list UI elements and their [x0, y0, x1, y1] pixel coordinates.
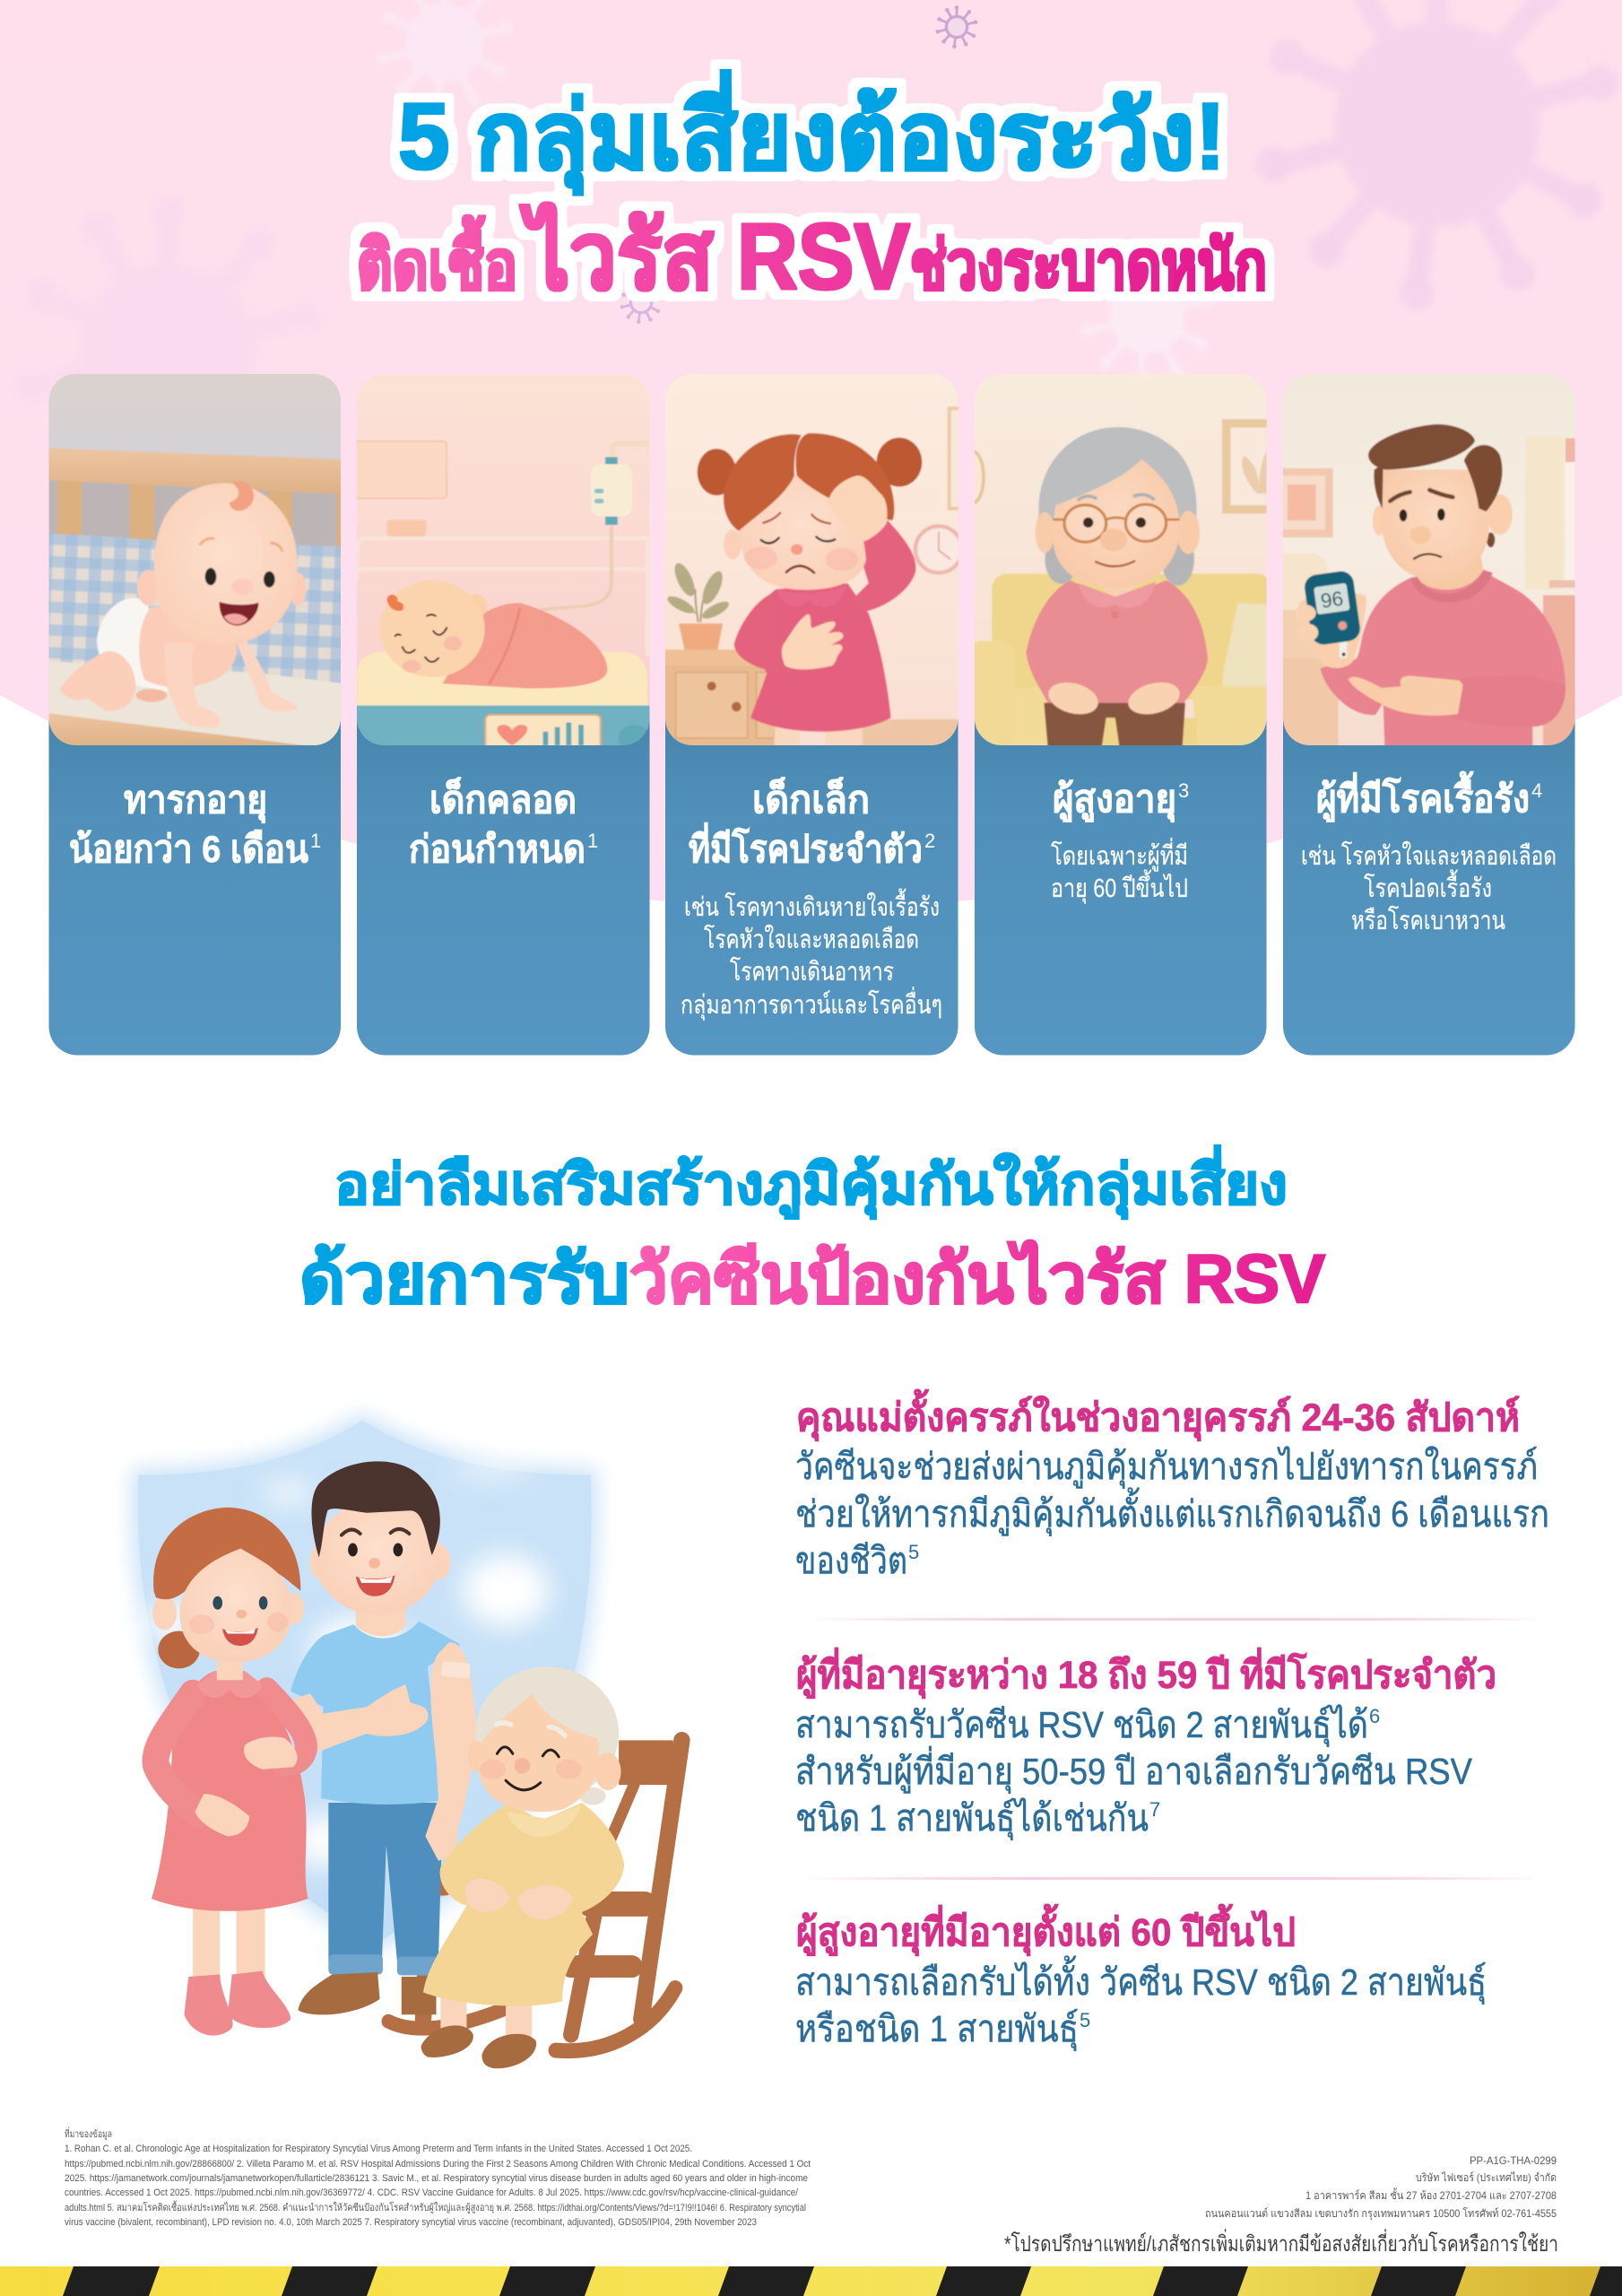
subtext: children: กลุ่มอาการดาวน์และโรคอื่นๆ [681, 987, 942, 1021]
card body [48, 691, 341, 1055]
vaccine recommendation 1: pregnant women [795, 1388, 1549, 1581]
heading: preterm: 1 [587, 830, 598, 852]
vaccine recommendation 3: seniors [795, 1903, 1487, 2051]
references: ที่มาของข้อมูล [65, 2126, 112, 2140]
vaccine recommendation 2: adults 18-59: 6 [1369, 1705, 1380, 1727]
title line 2 highlight: ไวรัส RSV [519, 203, 910, 309]
heading: preterm: เด็กคลอด [429, 777, 577, 821]
card body [357, 691, 649, 1055]
heading: children [689, 777, 935, 870]
heading line 2 blue part: ด้วยการรับ [299, 1241, 629, 1318]
vaccine recommendation 3: seniors: หรือชนิด 1 สายพันธุ์ [795, 2008, 1079, 2051]
panel: card 2 preterm [350, 372, 654, 1055]
heading: chronic disease: 4 [1531, 779, 1542, 802]
card body [1283, 691, 1574, 1055]
vaccine recommendation 1: pregnant women: 5 [908, 1541, 919, 1563]
heading: elderly: 3 [1178, 779, 1189, 802]
shield [131, 1413, 598, 1950]
title line 2 right: ช่วงระบาดหนัก [910, 228, 1267, 304]
references: countries. Accessed 1 Oct 2025. https://pubmed.ncbi.nlm.nih.gov/36369772/ 4. CDC. RSV Vaccine Guidance for Adults. 8 Jul 2025. https://www.cdc.gov/rsv/hcp/vaccine-clinical-guidance/ [65, 2187, 799, 2198]
company address: บริษัท ไฟเซอร์ (ประเทศไทย) จำกัด [1416, 2171, 1557, 2184]
person: father [291, 1461, 476, 2014]
vaccine recommendation 2: adults 18-59: ชนิด 1 สายพันธุ์ได้เช่นกัน [795, 1797, 1149, 1840]
heading: infants: 1 [310, 830, 321, 852]
vaccine recommendation 2: adults 18-59: 7 [1149, 1798, 1160, 1821]
person: grandmother in rocking chair [421, 1666, 624, 2068]
heading: chronic disease: ผู้ที่มีโรคเรื้อรัง [1316, 770, 1530, 822]
pink header background [0, 0, 1622, 908]
subtext: children [681, 888, 942, 1021]
panel: card 4 elderly [963, 372, 1271, 1055]
glucose reading: 96 [1319, 587, 1345, 613]
title [357, 70, 1267, 309]
vaccine recommendation 3: seniors: 5 [1080, 2009, 1090, 2031]
vaccine recommendation 2: adults 18-59 [795, 1648, 1496, 1840]
subtext: elderly: อายุ 60 ปีขึ้นไป [1051, 869, 1188, 904]
vaccine recommendation 1: pregnant women: คุณแม่ตั้งครรภ์ในช่วงอายุครรภ์ 24-36 สัปดาห์ [796, 1388, 1520, 1442]
heading: preterm [409, 777, 598, 870]
heading line 1: อย่าลืมเสริมสร้างภูมิคุ้มกันให้กลุ่มเสี่ยง [334, 1145, 1288, 1219]
references: virus vaccine (bivalent, recombinant), LPD revision no. 4.0, 10th March 2025 7. Respiratory syncytial virus vaccine (recombinant, adjuvanted), GDS05/IPI04, 29th November 2023 [65, 2217, 757, 2228]
heading: children: ที่มีโรคประจำตัว [689, 822, 923, 870]
heading: infants: น้อยกว่า 6 เดือน [69, 828, 308, 870]
subtext: elderly: โดยเฉพาะผู้ที่มี [1051, 838, 1188, 872]
heading: elderly: ผู้สูงอายุ [1053, 778, 1176, 822]
references [65, 2126, 811, 2228]
background virus decorations [16, 0, 1618, 508]
panel: card 3 children with chronic illness [664, 372, 962, 1055]
card body [665, 691, 958, 1055]
subtext: chronic disease: เช่น โรคหัวใจและหลอดเลือด [1301, 840, 1557, 871]
heading: infants: ทารกอายุ [124, 778, 267, 823]
heading: infants [69, 778, 321, 870]
references: 1. Rohan C. et al. Chronologic Age at Hospitalization for Respiratory Syncytial Virus Among Preterm and Term Infants in the United States. Accessed 1 Oct 2025. [65, 2144, 692, 2154]
vaccine recommendation 1: pregnant women: ของชีวิต [795, 1540, 907, 1581]
company address: PP-A1G-THA-0299 [1470, 2154, 1557, 2167]
subtext: chronic disease: หรือโรคเบาหวาน [1351, 905, 1505, 935]
person: pregnant mother [152, 1508, 308, 2036]
rocking chair [388, 1740, 681, 2051]
heading: children: 2 [924, 830, 935, 852]
subtext: children: โรคหัวใจและหลอดเลือด [704, 924, 919, 954]
card body [975, 691, 1266, 1055]
subtext: chronic disease [1301, 840, 1557, 935]
heading line 2 pink part: วัคซีนป้องกันไวรัส RSV [629, 1239, 1325, 1318]
subtext: chronic disease: โรคปอดเรื้อรัง [1364, 869, 1492, 903]
panel: card 5 chronic disease [1281, 372, 1579, 1055]
vaccine recommendation 2: adults 18-59: สำหรับผู้ที่มีอายุ 50-59 ปี อาจเลือกรับวัคซีน RSV [795, 1746, 1473, 1794]
company address: 1 อาคารพาร์ค สีลม ชั้น 27 ห้อง 2701-2704 และ 2707-2708 [1305, 2187, 1557, 2202]
illustration: family in front of shield [131, 1413, 681, 2068]
subtext: children: โรคทางเดินอาหาร [730, 956, 894, 987]
heading: children: เด็กเล็ก [752, 777, 870, 821]
references: adults.html 5. สมาคมโรคติดเชื้อแห่งประเทศไทย พ.ศ. 2568. คำแนะนำการให้วัคซีนป้องกันโรคสำหรับผู้ใหญ่และผู้สูงอายุ พ.ศ. 2568. https://idthai.org/Contents/Views/?d=!17!9!!1046! 6. Respiratory syncytial [65, 2200, 806, 2213]
company address: ถนนคอนแวนต์ แขวงสีลม เขตบางรัก กรุงเทพมหานคร 10500 โทรศัพท์ 02-761-4555 [1205, 2207, 1557, 2221]
illustration: grandmother on sofa [963, 372, 1271, 749]
subtext: elderly [1051, 838, 1188, 904]
title line 2 left: ติดเชื้อ [357, 215, 517, 304]
vaccine recommendation 2: adults 18-59: สามารถรับวัคซีน RSV ชนิด 2 สายพันธุ์ได้ [795, 1704, 1368, 1747]
vaccine recommendation 2: adults 18-59: ผู้ที่มีอายุระหว่าง 18 ถึง 59 ปี ที่มีโรคประจำตัว [796, 1648, 1496, 1700]
references: 2025. https://jamanetwork.com/journals/jamanetworkopen/fullarticle/2836121 3. Savic M., et al. Respiratory syncytial virus disease burden in adults aged 60 years and older in high-income [65, 2173, 808, 2184]
panel: card 1 infants [47, 372, 344, 1055]
illustration: crawling baby in crib [47, 372, 344, 748]
vaccine recommendation 3: seniors: ผู้สูงอายุที่มีอายุตั้งแต่ 60 ปีขึ้นไป [796, 1903, 1296, 1957]
vaccine recommendation 3: seniors: สามารถเลือกรับได้ทั้ง วัคซีน RSV ชนิด 2 สายพันธุ์ [795, 1955, 1487, 2005]
references: https://pubmed.ncbi.nlm.nih.gov/28866800/ 2. Villeta Paramo M. et al. RSV Hospital Admissions During the First 2 Seasons Among Children With Chronic Medical Conditions. Accessed 1 Oct [65, 2159, 811, 2170]
section heading: vaccination [299, 1145, 1325, 1318]
company address [1205, 2154, 1557, 2221]
caution stripe [0, 2266, 1622, 2296]
illustration: preterm baby in incubator [350, 372, 654, 752]
illustration: man with glucose meter [1281, 372, 1579, 748]
title line 1: 5 กลุ่มเสี่ยงต้องระวัง! [398, 70, 1226, 196]
subtext: children: เช่น โรคทางเดินหายใจเรื้อรัง [684, 888, 940, 922]
heading: preterm: ก่อนกำหนด [409, 828, 585, 870]
illustration: sick girl holding head [664, 372, 962, 748]
